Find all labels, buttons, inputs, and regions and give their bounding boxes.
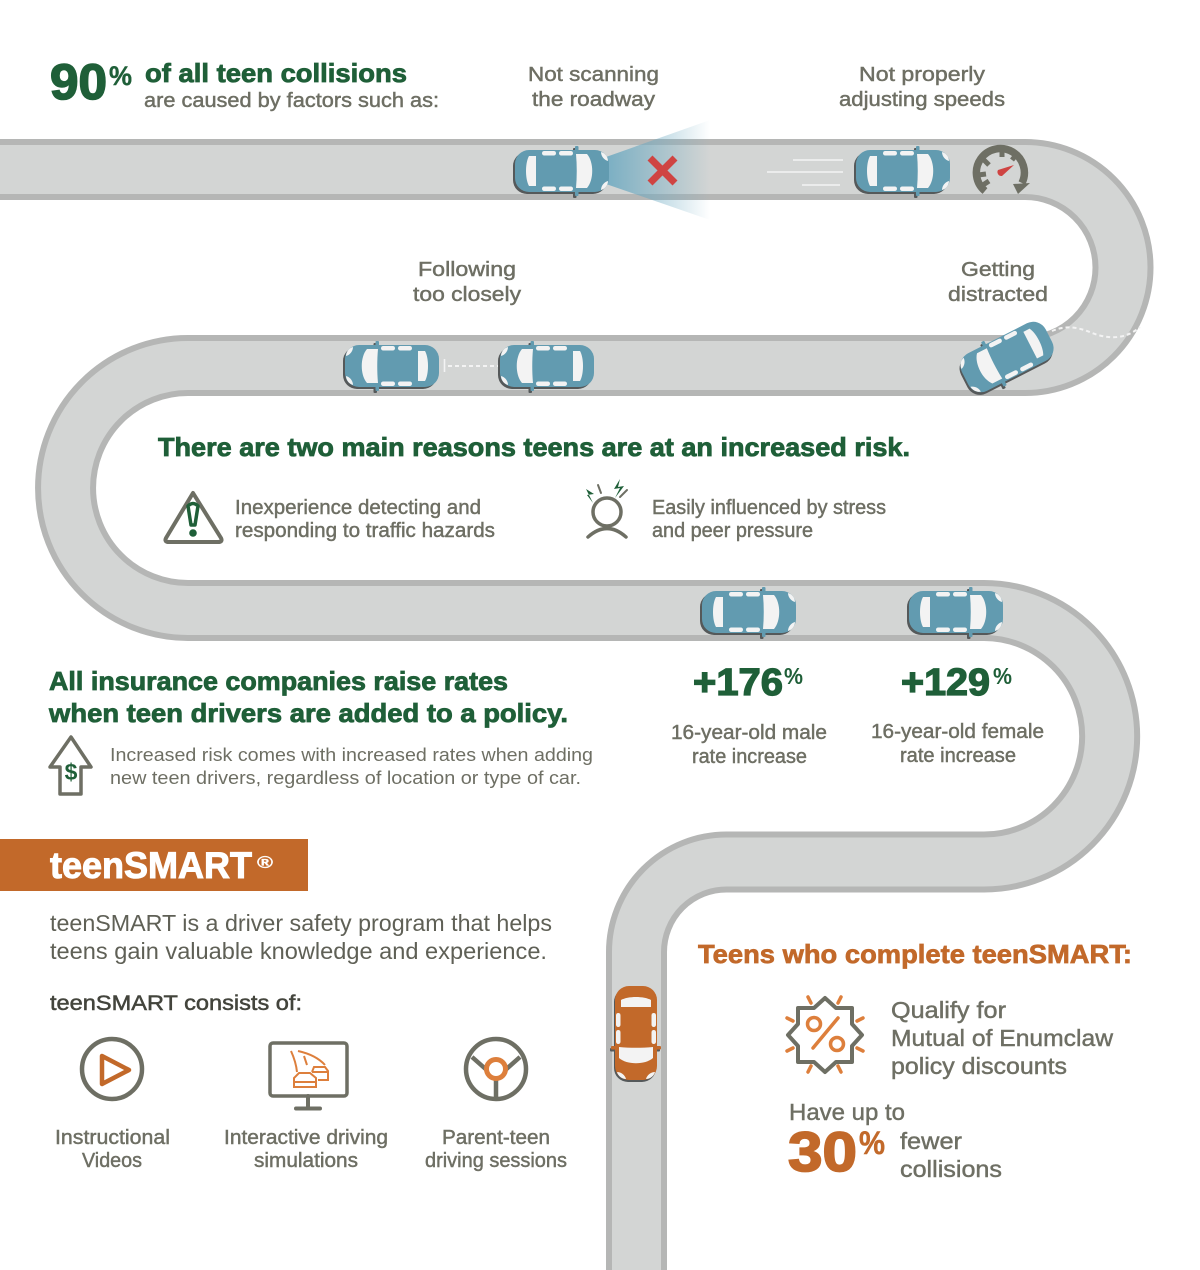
heading: teens who complete: Teens who complete teenSMART:	[698, 939, 1132, 969]
following distance marker	[444, 359, 499, 372]
caption: sessions: driving sessions	[425, 1150, 567, 1172]
text: inexperience	[235, 497, 495, 542]
text: policy discounts	[891, 997, 1113, 1079]
label: not properly adjusting speeds: adjusting speeds	[839, 89, 1005, 111]
car: female rate	[907, 587, 1003, 639]
text: program description: teenSMART is a driver safety program that helps	[50, 910, 552, 936]
label: following too closely: Following	[418, 259, 516, 281]
text: fewer collisions: fewer	[900, 1128, 962, 1154]
label: not scanning the roadway: Not scanning	[528, 64, 659, 86]
vision cone	[606, 120, 710, 220]
text: inexperience: Inexperience detecting and	[235, 497, 481, 519]
label: not properly adjusting speeds	[839, 64, 1005, 111]
heading: insurance rates: All insurance companies raise rates	[49, 666, 508, 696]
text: program description	[50, 910, 552, 964]
headline: 90% of all teen collisions: are caused by factors such as:	[144, 90, 439, 112]
stat: 30%: %	[859, 1125, 885, 1161]
caption: videos: Videos	[82, 1150, 142, 1172]
text: fewer collisions	[900, 1128, 1002, 1182]
speed lines	[767, 160, 843, 185]
caption: female: 16-year-old female	[871, 721, 1044, 743]
headline: 90% of all teen collisions: %	[109, 61, 132, 91]
icon: speedometer	[976, 149, 1030, 194]
caption: simulations	[224, 1127, 388, 1172]
subheading: consists of: teenSMART consists of:	[50, 992, 302, 1015]
icon: warning triangle	[165, 493, 222, 542]
text: fewer collisions: collisions	[900, 1156, 1002, 1182]
icon: stressed person	[586, 479, 627, 537]
caption: male: 16-year-old male	[671, 722, 827, 744]
text: increased risk: Increased risk comes with increased rates when adding	[110, 744, 593, 765]
text: policy discounts: Mutual of Enumclaw	[891, 1025, 1113, 1051]
text: increased risk: new teen drivers, regardless of location or type of car.	[110, 767, 581, 788]
caption: female	[871, 721, 1044, 767]
label: getting distracted: Getting	[961, 259, 1035, 281]
stat: 30%: 30	[788, 1120, 857, 1183]
caption: sessions: Parent-teen	[442, 1127, 550, 1149]
caption: videos: Instructional	[55, 1127, 170, 1149]
banner: teenSMART: ®	[257, 853, 274, 872]
car: not scanning	[513, 146, 609, 198]
text: increased risk	[110, 744, 593, 788]
icon: simulator monitor	[270, 1043, 347, 1108]
heading: two main reasons: There are two main reasons teens are at an increased risk.	[158, 432, 910, 462]
label: getting distracted	[948, 259, 1048, 306]
car: distracted	[952, 313, 1061, 403]
car: male rate	[700, 587, 796, 639]
stat: +176%: %	[784, 663, 803, 689]
banner: teenSMART	[0, 839, 308, 891]
label: following too closely: too closely	[413, 284, 521, 306]
icon: arrow with dollar: $	[65, 759, 78, 785]
icon: discount badge	[787, 997, 863, 1072]
car: speeding	[854, 146, 950, 198]
heading: insurance rates	[48, 666, 568, 728]
headline: 90% of all teen collisions	[50, 54, 439, 112]
text: easily influenced: and peer pressure	[652, 520, 813, 542]
label: not properly adjusting speeds: Not properly	[859, 64, 985, 86]
banner: teenSMART: teenSMART	[50, 845, 252, 886]
headline: 90% of all teen collisions: 90	[50, 54, 107, 110]
stat: +176%: +176	[693, 662, 783, 704]
icon: arrow with dollar	[50, 737, 91, 794]
heading: insurance rates: when teen drivers are added to a policy.	[48, 698, 568, 728]
caption: simulations: simulations	[254, 1150, 358, 1172]
label: following too closely	[413, 259, 521, 306]
caption: male: rate increase	[692, 746, 807, 768]
headline: 90% of all teen collisions: of all teen collisions	[145, 58, 407, 88]
text: inexperience: responding to traffic hazards	[235, 520, 495, 542]
icon: red x	[650, 158, 675, 183]
text: policy discounts: Qualify for	[891, 997, 1006, 1023]
swerve trail	[1052, 327, 1140, 337]
label: not scanning the roadway	[528, 64, 659, 111]
stat: +129%: +129	[901, 662, 990, 704]
car: orange teenSMART	[610, 986, 661, 1082]
stat: 30%	[788, 1120, 885, 1183]
caption: videos	[55, 1127, 170, 1172]
text: program description: teens gain valuable knowledge and experience.	[50, 938, 547, 964]
text: have up to: Have up to	[789, 1099, 905, 1125]
caption: male	[671, 722, 827, 768]
icon: steering wheel	[466, 1039, 526, 1099]
text: easily influenced: Easily influenced by stress	[652, 497, 886, 519]
label: getting distracted: distracted	[948, 284, 1048, 306]
stat: +129%: %	[993, 663, 1012, 689]
label: not scanning the roadway: the roadway	[532, 89, 655, 111]
icon: play	[82, 1039, 142, 1099]
caption: simulations: Interactive driving	[224, 1127, 388, 1149]
text: policy discounts: policy discounts	[891, 1053, 1067, 1079]
caption: female: rate increase	[900, 745, 1016, 767]
car: following front	[498, 341, 594, 393]
caption: sessions	[425, 1127, 567, 1172]
car: following rear	[343, 341, 439, 393]
text: easily influenced	[652, 497, 886, 542]
